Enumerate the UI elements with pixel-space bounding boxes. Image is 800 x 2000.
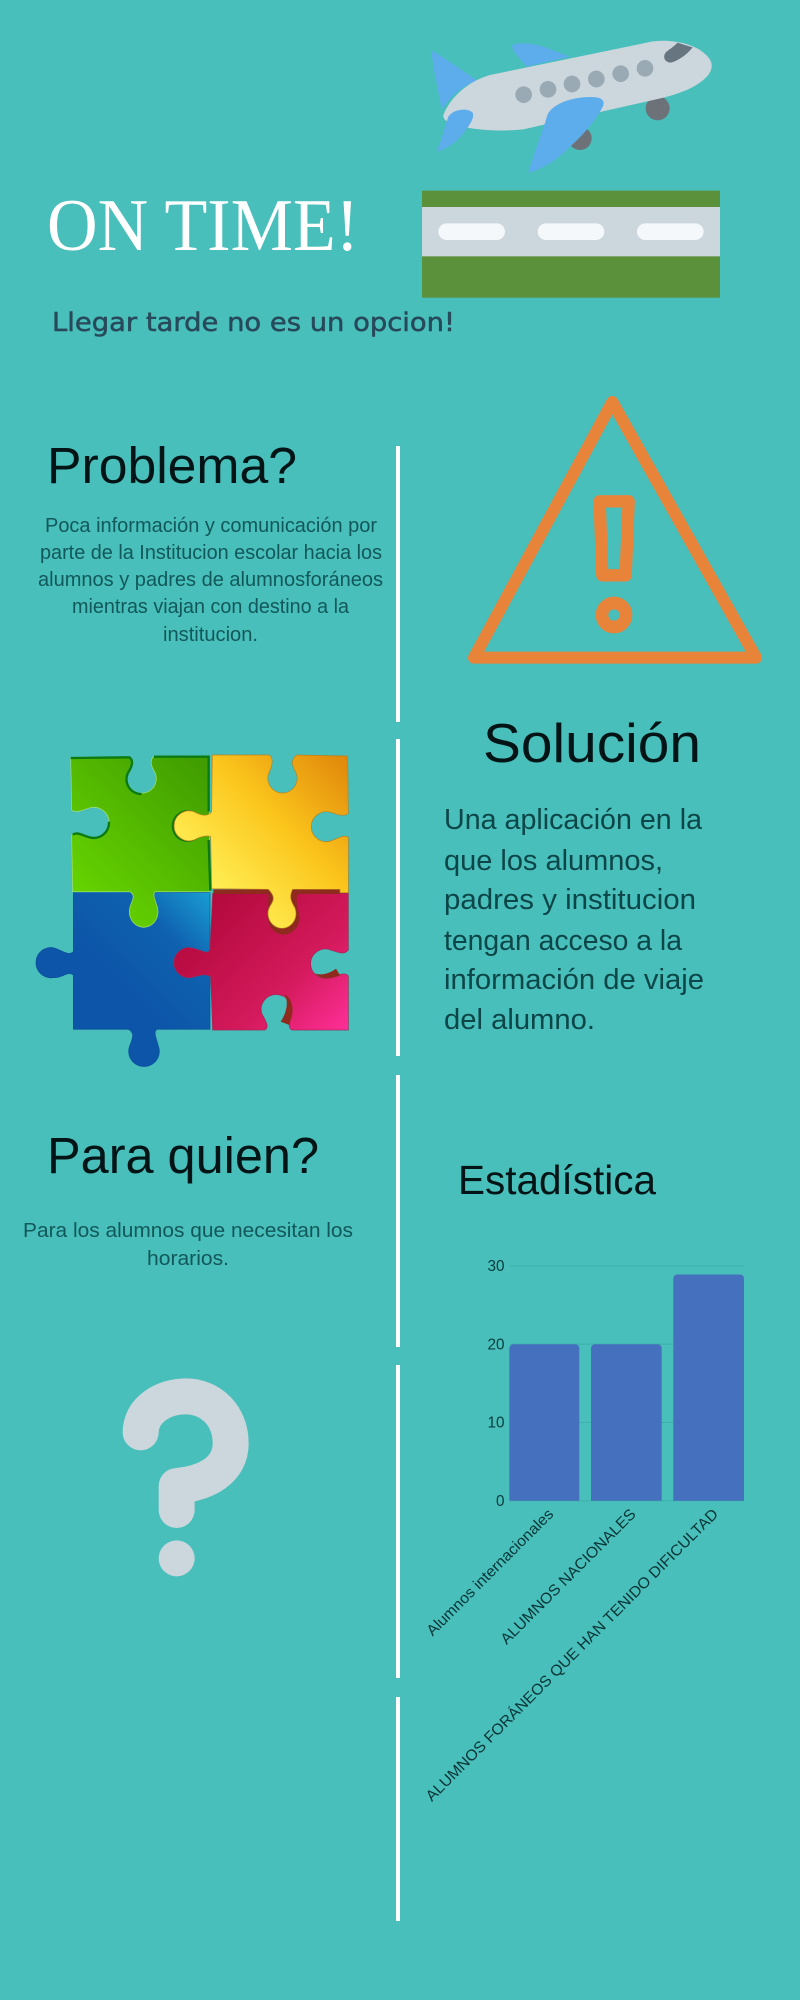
chart y axis labels: 30 bbox=[487, 1258, 504, 1275]
bar chart bbox=[423, 1258, 744, 1805]
text block: problem description: institucion. bbox=[163, 623, 258, 646]
text block: solution description: padres y institucion bbox=[444, 884, 696, 916]
text block: solution description: información de viaje bbox=[444, 964, 704, 996]
text block: audience description: Para los alumnos que necesitan los bbox=[23, 1219, 353, 1242]
text block: solution description: tengan acceso a la bbox=[444, 925, 683, 957]
icon: question mark bbox=[141, 1396, 231, 1576]
chart x axis labels: Alumnos internacionales bbox=[423, 1506, 557, 1639]
chart y axis labels: 10 bbox=[487, 1414, 504, 1432]
chart y axis labels: 20 bbox=[487, 1336, 504, 1354]
icon: runway bbox=[422, 191, 720, 298]
puzzle piece: pink bbox=[174, 889, 348, 1030]
puzzle piece: blue bbox=[36, 893, 210, 1067]
text block: solution description: Una aplicación en la bbox=[444, 804, 703, 836]
chart y axis labels: 0 bbox=[496, 1493, 504, 1510]
chart gridlines bbox=[510, 1266, 744, 1501]
text block: solution description bbox=[444, 804, 704, 1036]
puzzle piece: yellow bbox=[174, 755, 348, 928]
text block: problem description: mientras viajan con destino a la bbox=[72, 595, 350, 618]
chart bars bbox=[509, 1274, 744, 1501]
vertical divider lines bbox=[396, 446, 400, 1921]
chart x axis labels: ALUMNOS FORÁNEOS QUE HAN TENIDO DIFICULTAD bbox=[423, 1506, 722, 1805]
subtitle: Llegar tarde no es un opcion! bbox=[52, 308, 455, 338]
chart y axis labels bbox=[487, 1258, 504, 1510]
heading: Para quien: Para quien? bbox=[47, 1127, 319, 1184]
text block: audience description: horarios. bbox=[147, 1247, 229, 1270]
text block: problem description: parte de la Institucion escolar hacia los bbox=[40, 541, 382, 564]
icon: warning triangle bbox=[474, 402, 756, 658]
chart x axis labels: ALUMNOS NACIONALES bbox=[497, 1506, 640, 1648]
heading: Problema: Problema? bbox=[47, 437, 297, 494]
text block: solution description: del alumno. bbox=[444, 1004, 595, 1036]
text block: problem description: Poca información y comunicación por bbox=[45, 514, 377, 537]
text block: problem description: alumnos y padres de alumnosforáneos bbox=[38, 568, 383, 591]
title: ON TIME! bbox=[47, 185, 359, 267]
icon: jigsaw puzzle bbox=[36, 755, 348, 1067]
text block: solution description: que los alumnos, bbox=[444, 845, 663, 877]
icon: airplane bbox=[431, 41, 712, 173]
puzzle piece: green bbox=[71, 756, 210, 927]
heading: Solucion: Solución bbox=[483, 712, 701, 774]
text block: audience description bbox=[23, 1219, 353, 1270]
text block: problem description bbox=[38, 514, 383, 646]
heading: Estadistica: Estadística bbox=[458, 1157, 656, 1203]
